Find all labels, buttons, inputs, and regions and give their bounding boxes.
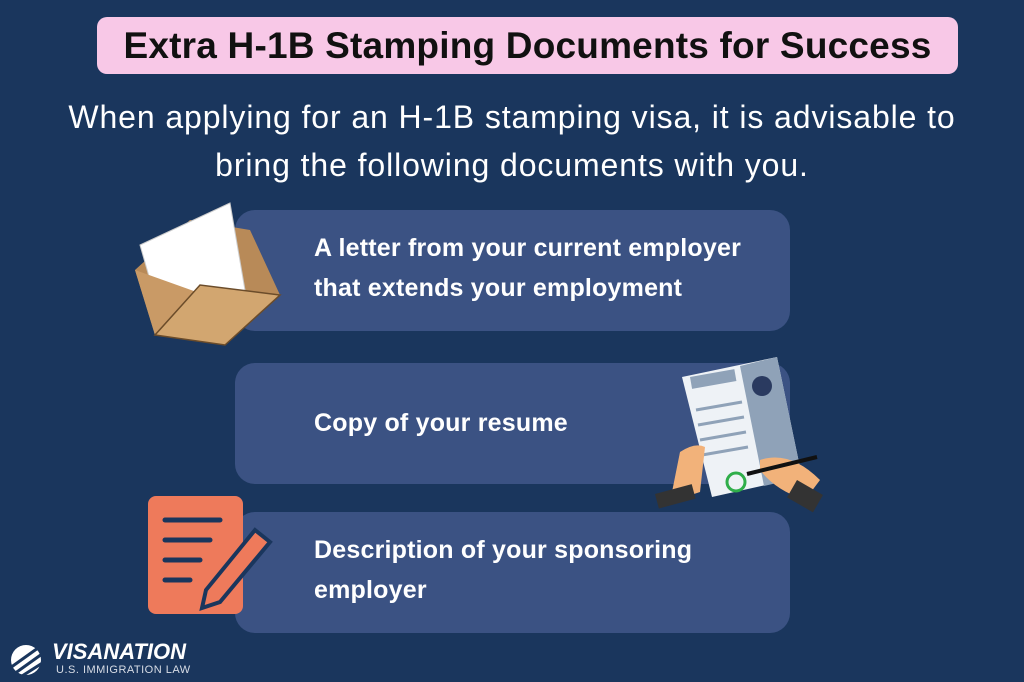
- title: Extra H-1B Stamping Documents for Success: [123, 25, 932, 66]
- icon: envelope: [135, 202, 282, 346]
- logo: VISANATION: [52, 639, 186, 664]
- icon: resume with hands: [655, 357, 823, 512]
- card: resume: Copy of your resume: [314, 409, 568, 437]
- card: employer letter: that extends your employment: [314, 274, 682, 302]
- title: [97, 17, 958, 74]
- subtitle: bring the following documents with you.: [215, 147, 809, 183]
- card: resume: [235, 363, 790, 484]
- card: employer letter: [235, 210, 790, 331]
- logo: [11, 639, 191, 676]
- icon: notepad with pencil: [148, 496, 273, 614]
- logo: U.S. IMMIGRATION LAW: [56, 664, 191, 676]
- card: employer letter: A letter from your current employer: [314, 234, 741, 262]
- subtitle: When applying for an H-1B stamping visa, it is advisable to: [68, 99, 956, 135]
- card: sponsoring employer: [235, 512, 790, 633]
- card: sponsoring employer: Description of your sponsoring: [314, 536, 692, 564]
- subtitle: [68, 99, 956, 183]
- card: sponsoring employer: employer: [314, 576, 427, 604]
